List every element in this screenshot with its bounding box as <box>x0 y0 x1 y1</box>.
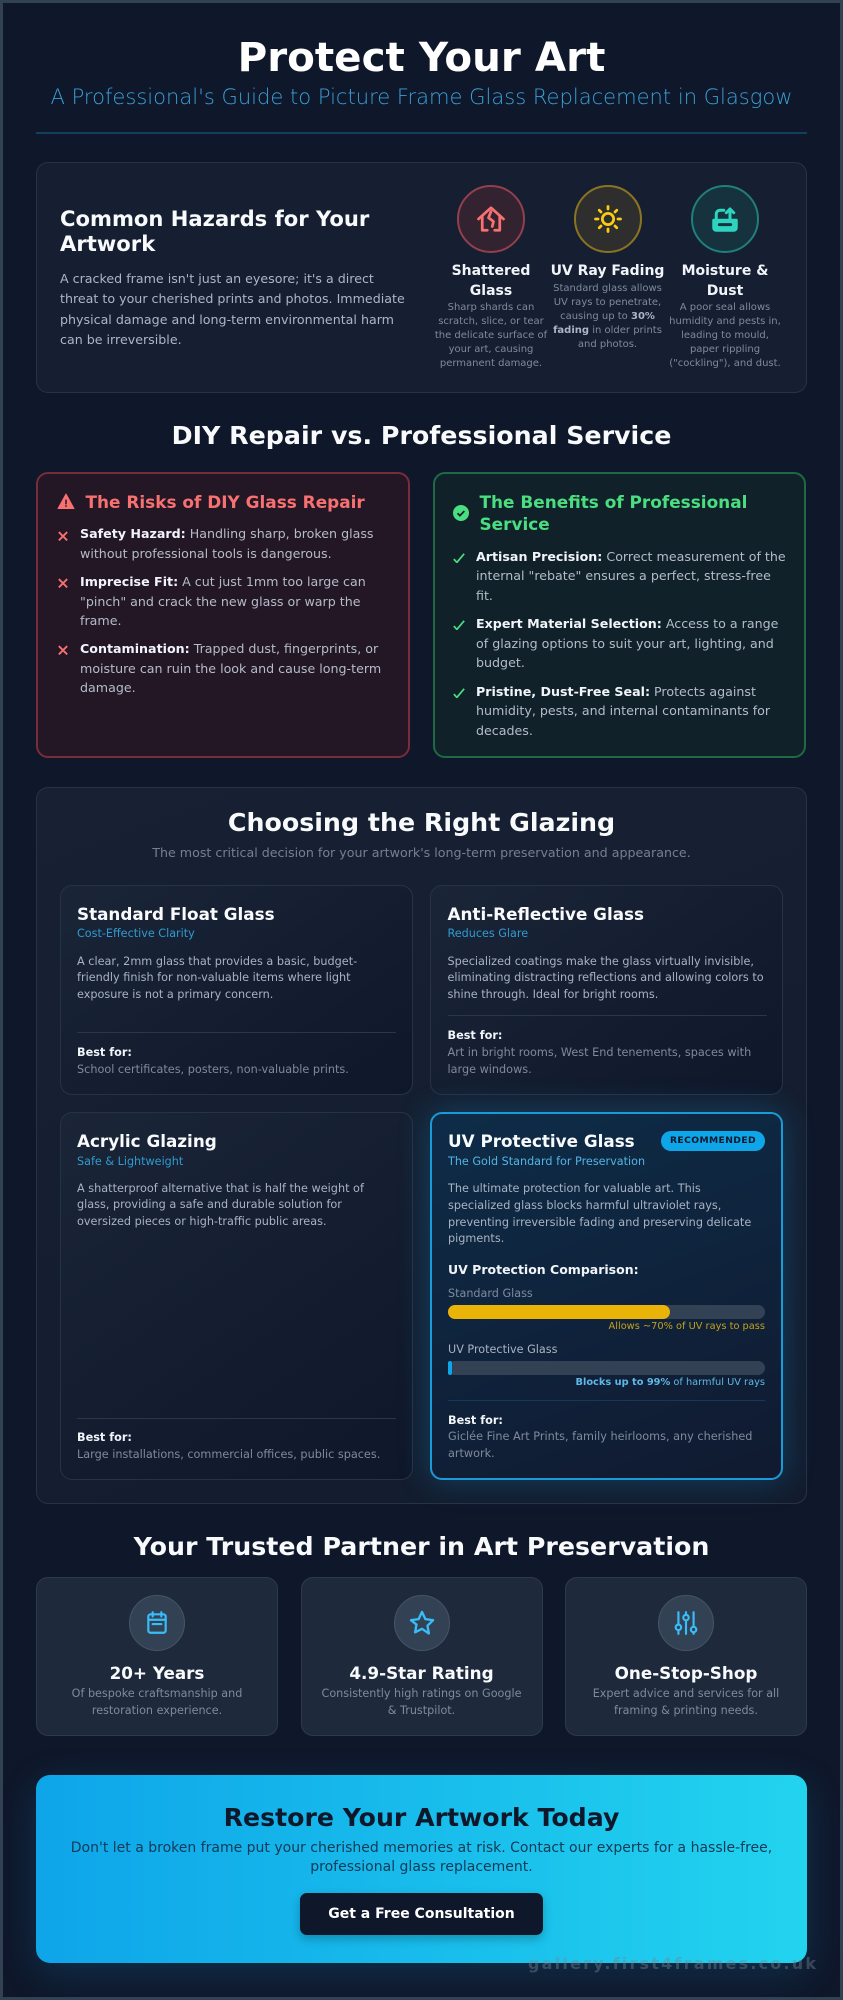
icon: calendar <box>129 1595 185 1651</box>
card body: A shatterproof alternative that is half the weight of <box>77 1182 364 1194</box>
hazards text: physical damage and long-term environmental harm <box>60 312 394 327</box>
hazard: uv ray fading: and photos. <box>578 339 637 350</box>
best for: School certificates, posters, non-valuable prints. <box>77 1063 349 1076</box>
hazards text: threat to your cherished prints and photos. Immediate <box>60 291 405 306</box>
best for: Best for: <box>77 1431 132 1444</box>
benefit: material <box>476 616 778 670</box>
best for: Best for: <box>448 1414 503 1426</box>
stat: 20+ years <box>72 1663 242 1716</box>
hazard: shattered glass: scratch, slice, or tear <box>438 316 544 327</box>
icon: sliders <box>658 1595 714 1651</box>
best for <box>448 1029 751 1076</box>
recommended badge: RECOMMENDED <box>670 1134 756 1146</box>
best for: Best for: <box>77 1046 132 1059</box>
header <box>51 33 792 109</box>
check icon <box>453 620 465 630</box>
panel: 20+ years <box>36 1577 278 1736</box>
hazards text: can be irreversible. <box>60 332 182 347</box>
risk: contamination: moisture can ruin the look and cause long-term <box>80 661 381 676</box>
hazard: uv ray fading <box>551 263 664 350</box>
risk: contamination: Contamination: Trapped dust, fingerprints, or <box>80 641 378 656</box>
hazards heading: Artwork <box>60 230 155 256</box>
caption: uv: Blocks up to 99% of harmful UV rays <box>576 1377 765 1388</box>
hazards text <box>60 271 405 347</box>
hazard: shattered glass: Shattered <box>452 263 530 279</box>
benefit: seal: decades. <box>476 723 533 738</box>
icon: star <box>394 1595 450 1651</box>
stat: rating <box>322 1663 521 1716</box>
card body: exposure is not a primary concern. <box>77 988 273 1001</box>
watermark: gallery.first4frames.co.uk <box>528 1954 818 1973</box>
risk: fit: Imprecise Fit: A cut just 1mm too large can <box>80 574 366 589</box>
card body: The ultimate protection for valuable art. This <box>448 1182 701 1195</box>
risks heading: The Risks of DIY Glass Repair <box>86 492 365 512</box>
best for: Best for: <box>448 1029 502 1042</box>
risk: fit: frame. <box>80 613 122 628</box>
hazard: shattered glass <box>435 263 548 369</box>
stat: rating: & Trustpilot. <box>388 1704 455 1716</box>
hazard: shattered glass: the delicate surface of <box>435 330 547 341</box>
hazard: moisture and dust <box>669 263 781 369</box>
best for: Art in bright rooms, West End tenements, spaces with <box>448 1046 751 1059</box>
benefits heading: Service <box>480 514 550 534</box>
icon: warning <box>58 494 74 509</box>
best for <box>448 1414 752 1460</box>
label: standard: Standard Glass <box>448 1286 533 1300</box>
card body: specialized glass blocks harmful ultraviolet rays, <box>448 1199 721 1212</box>
cta text: professional glass replacement. <box>310 1859 533 1875</box>
risk: safety: without professional tools is dangerous. <box>80 546 332 561</box>
icon: moisture <box>691 185 759 253</box>
card body: glass, providing a safe and durable solution for <box>77 1198 342 1211</box>
cta button: Get a Free Consultation <box>328 1906 515 1922</box>
stat: 20+ years: Of bespoke craftsmanship and <box>72 1686 242 1700</box>
call to action panel <box>36 1775 807 1963</box>
icon: check circle <box>453 505 469 521</box>
hazard: shattered glass: Sharp shards can <box>448 302 534 313</box>
cta button <box>300 1893 543 1935</box>
card body: shine through. Ideal for bright rooms. <box>448 988 658 1001</box>
hazard: uv ray fading: causing up to 30% <box>560 311 655 322</box>
hazard: uv ray fading: Standard glass allows <box>553 283 662 294</box>
hazard: shattered glass: permanent damage. <box>440 358 542 369</box>
hazard: moisture and dust: ("cockling"), and dust. <box>669 358 781 369</box>
benefit: material: of glazing options to suit your art, lighting, and <box>476 636 774 651</box>
benefit: seal: humidity, pests, and internal contaminants for <box>476 703 770 718</box>
label: uv: UV Protective Glass <box>448 1343 557 1356</box>
recommended badge <box>661 1130 765 1150</box>
benefit: precision: internal "rebate" ensures a perfect, stress-free <box>476 568 771 583</box>
best for: Large installations, commercial offices, public spaces. <box>77 1448 380 1461</box>
check icon <box>453 553 465 563</box>
uv chart <box>448 1286 765 1388</box>
card body: preventing irreversible fading and preserving delicate <box>448 1216 751 1229</box>
x icon <box>58 531 68 541</box>
hazard: moisture and dust: A poor seal allows <box>680 302 770 313</box>
stat: 20+ years: 20+ Years <box>110 1663 204 1683</box>
card: acrylic glazing <box>60 1112 413 1480</box>
card subtitle: Safe & Lightweight <box>77 1154 183 1168</box>
stat: rating: Consistently high ratings on Google <box>322 1686 521 1700</box>
benefits heading <box>480 492 747 534</box>
stat: one-stop-shop <box>593 1663 779 1716</box>
x icon <box>58 645 68 656</box>
card title: Anti-Reflective Glass <box>448 904 644 924</box>
uv comparison heading: UV Protection Comparison: <box>448 1262 639 1276</box>
hazards heading <box>60 206 370 256</box>
card subtitle: The Gold Standard for Preservation <box>448 1154 645 1168</box>
panel: one-stop-shop <box>565 1577 807 1736</box>
best for: Giclée Fine Art Prints, family heirlooms, any cherished <box>448 1430 752 1443</box>
heading: diy vs pro: DIY Repair vs. Professional Service <box>172 420 671 450</box>
best for <box>77 1431 380 1461</box>
risk: fit: "pinch" and crack the new glass or warp the <box>80 594 361 609</box>
card body: oversized pieces or high-traffic public areas. <box>77 1215 327 1228</box>
card title: Standard Float Glass <box>77 904 275 924</box>
risk: contamination <box>80 641 381 695</box>
benefit: material: Expert Material Selection: Access to a range <box>476 616 778 631</box>
card body: A clear, 2mm glass that provides a basic, budget- <box>77 954 357 968</box>
caption: standard: Allows ~70% of UV rays to pass <box>609 1321 765 1332</box>
benefit: precision: fit. <box>476 588 493 603</box>
benefit: precision: Artisan Precision: Correct measurement of the <box>476 548 786 564</box>
panel: choosing glazing <box>36 787 807 1504</box>
stat: rating: 4.9-Star Rating <box>349 1663 494 1683</box>
stat: one-stop-shop: One-Stop-Shop <box>615 1663 757 1683</box>
benefits heading: The Benefits of Professional <box>480 492 747 512</box>
hazard: uv ray fading: fading in older prints <box>553 325 662 336</box>
hazard: moisture and dust: Moisture & <box>682 263 768 279</box>
hazard: uv ray fading: UV rays to penetrate, <box>554 297 661 308</box>
title: Protect Your Art <box>238 33 605 81</box>
card body: Specialized coatings make the glass virtually invisible, <box>448 954 754 968</box>
check icon <box>453 688 465 698</box>
subtitle: A Professional's Guide to Picture Frame Glass Replacement in Glasgow <box>51 84 792 109</box>
panel: common hazards <box>36 162 807 393</box>
hazard: shattered glass: your art, causing <box>449 344 533 355</box>
card: standard float glass <box>60 885 413 1095</box>
cta heading: Restore Your Artwork Today <box>224 1803 619 1832</box>
heading: trusted partner: Your Trusted Partner in Art Preservation <box>134 1532 709 1560</box>
risk: contamination: damage. <box>80 680 136 695</box>
risks list <box>58 526 381 695</box>
card body <box>77 954 357 1001</box>
benefit: material: budget. <box>476 655 525 670</box>
card body: friendly finish for non-valuable items where light <box>77 971 350 984</box>
risk: safety <box>80 526 374 561</box>
benefit: seal <box>476 684 770 738</box>
best for: large windows. <box>448 1063 532 1076</box>
benefit: seal: Pristine, Dust-Free Seal: Protects against <box>476 684 756 698</box>
panel: risks of diy <box>36 472 410 758</box>
panel: benefits of professional <box>433 472 806 758</box>
stat: one-stop-shop: Expert advice and services for all <box>593 1686 779 1700</box>
risk: safety: Safety Hazard: Handling sharp, broken glass <box>80 526 374 541</box>
card body <box>448 1182 751 1245</box>
benefit: precision <box>476 548 786 603</box>
hazard: moisture and dust: humidity and pests in, <box>669 316 781 327</box>
hazard: uv ray fading: UV Ray Fading <box>551 263 664 279</box>
stat: 20+ years: restoration experience. <box>92 1704 222 1716</box>
card subtitle: Reduces Glare <box>448 927 528 940</box>
card title: UV Protective Glass <box>448 1130 635 1150</box>
best for <box>77 1046 349 1076</box>
best for: artwork. <box>448 1447 495 1460</box>
card body <box>448 954 764 1001</box>
card body: eliminating distracting reflections and allowing colors to <box>448 971 764 984</box>
cta text: Don't let a broken frame put your cherished memories at risk. Contact our experts for a hassle-free, <box>71 1840 772 1856</box>
panel: rating <box>300 1577 542 1736</box>
hazard: moisture and dust: Dust <box>707 283 743 299</box>
x icon <box>58 578 68 588</box>
bar: uv <box>448 1361 765 1375</box>
stat: one-stop-shop: framing & printing needs. <box>614 1704 758 1716</box>
hazards heading: Common Hazards for Your <box>60 206 369 230</box>
card title: Acrylic Glazing <box>77 1130 217 1150</box>
card body <box>77 1182 364 1228</box>
hazard: moisture and dust: paper rippling <box>690 344 760 355</box>
hazard: moisture and dust: leading to mould, <box>681 330 769 341</box>
hazard: shattered glass: Glass <box>470 283 512 299</box>
risk: fit <box>80 574 366 628</box>
card body: pigments. <box>448 1232 504 1245</box>
glazing subheading: The most critical decision for your artwork's long-term preservation and appearance. <box>152 845 691 860</box>
card subtitle: Cost-Effective Clarity <box>77 927 195 940</box>
card: uv protective glass <box>430 1112 783 1480</box>
icon: shattered glass <box>457 185 525 253</box>
card: anti-reflective glass <box>430 885 783 1095</box>
benefits list <box>453 548 786 738</box>
hazards text: A cracked frame isn't just an eyesore; it's a direct <box>60 271 374 286</box>
cta text <box>71 1840 772 1875</box>
glazing heading: Choosing the Right Glazing <box>228 808 615 837</box>
icon: uv sun <box>574 185 642 253</box>
bar: standard <box>448 1305 765 1319</box>
